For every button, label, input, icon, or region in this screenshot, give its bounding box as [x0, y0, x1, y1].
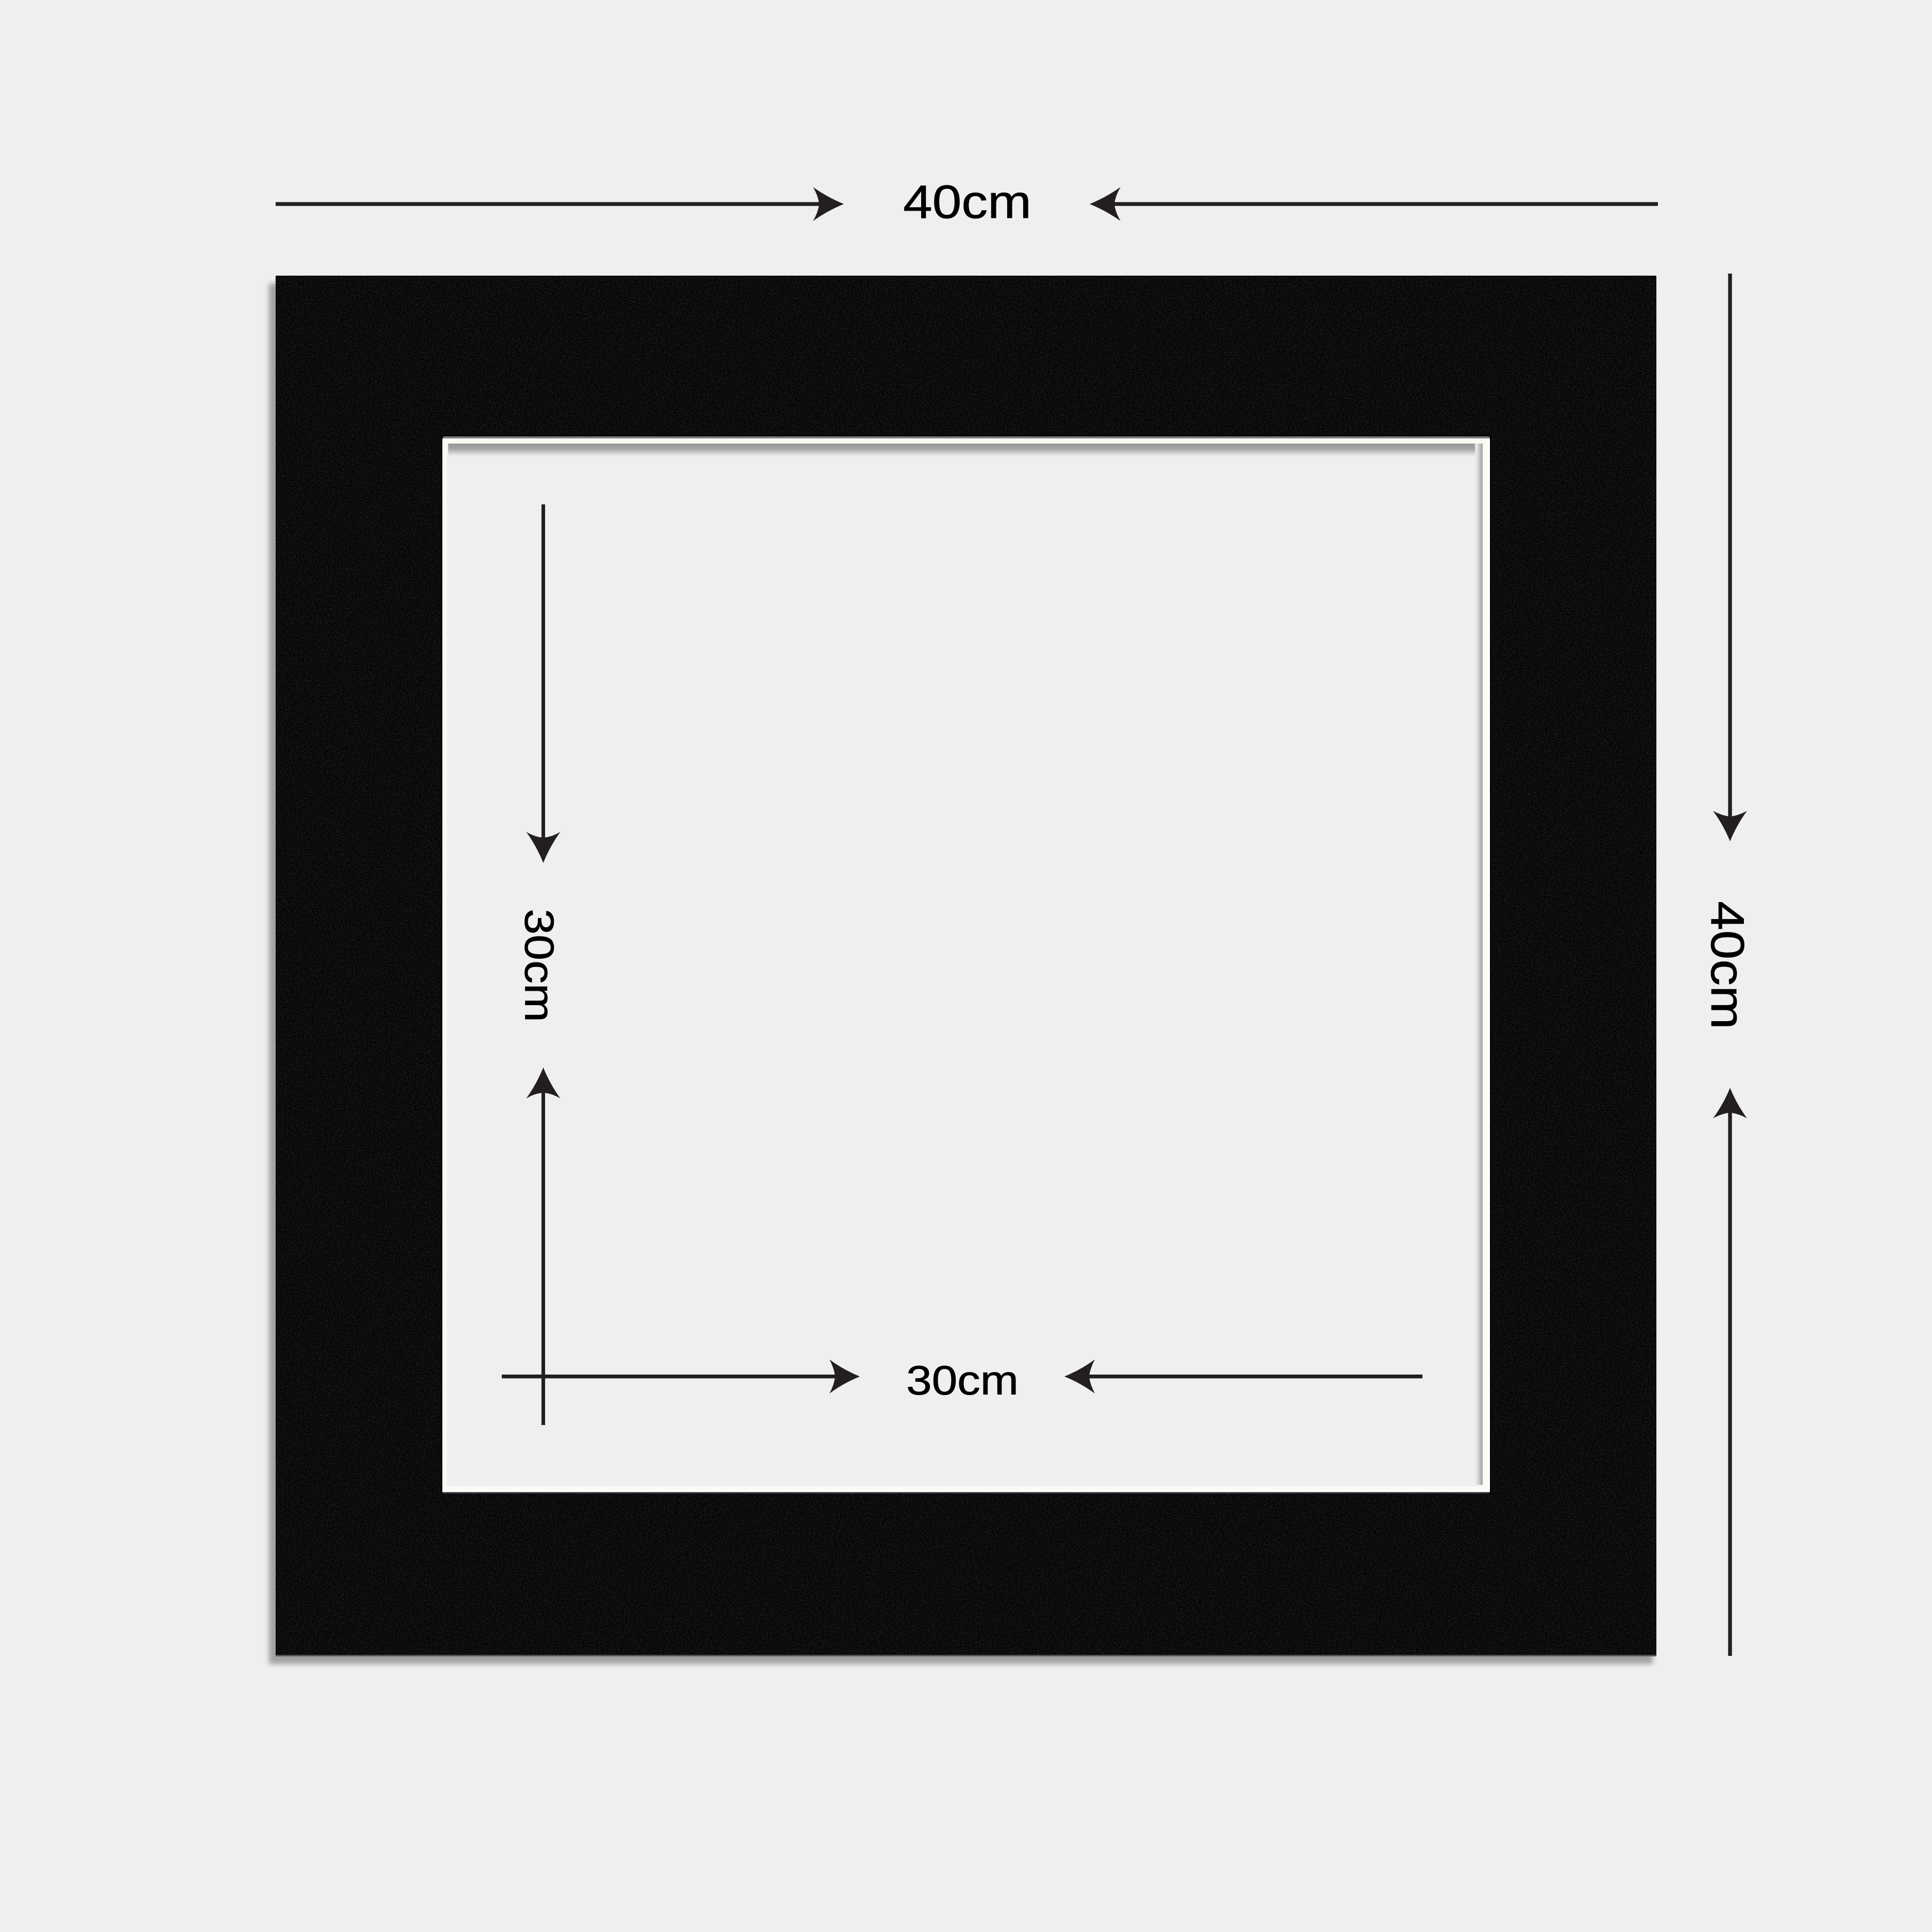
window bevel bottom highlight [443, 1490, 1489, 1492]
arrow: left, pointing right [502, 1360, 860, 1394]
window opening [447, 444, 1483, 1486]
window top inner shadow [448, 444, 1483, 456]
window bevel [442, 438, 1490, 1492]
dimension: inner height 30cm [516, 504, 563, 1425]
arrow: top, pointing down [1713, 274, 1747, 841]
window: cut-out opening [441, 435, 1491, 1494]
label: 30cm rotated: 30cm [516, 909, 563, 1022]
mount drop shadow [269, 283, 1653, 1664]
window bottom grey edge [443, 1492, 1489, 1494]
panel: black mount board with window [269, 276, 1656, 1664]
arrow: top, pointing down [527, 504, 561, 863]
mount board [276, 276, 1656, 1656]
arrow: bottom, pointing up [527, 1067, 561, 1425]
dimension: outer height 40cm [1701, 274, 1753, 1656]
window right inner shadow [1475, 444, 1483, 1485]
arrow: bottom, pointing up [1713, 1088, 1747, 1656]
mount paper grain [276, 276, 1656, 1656]
dimension: inner width 30cm [502, 1357, 1422, 1403]
dimension: outer width 40cm [276, 176, 1658, 228]
window bevel right highlight [1488, 438, 1490, 1492]
label: 30cm: 30cm [906, 1357, 1019, 1403]
arrow: left, pointing right [276, 187, 844, 221]
window dark edge [441, 435, 1491, 1494]
window top grey edge [443, 436, 1489, 438]
mount bottom edge [276, 1655, 1656, 1656]
label: 40cm rotated: 40cm [1701, 901, 1753, 1029]
arrow: right, pointing left [1064, 1360, 1422, 1394]
label: 40cm: 40cm [903, 176, 1031, 228]
arrow: right, pointing left [1090, 187, 1658, 221]
